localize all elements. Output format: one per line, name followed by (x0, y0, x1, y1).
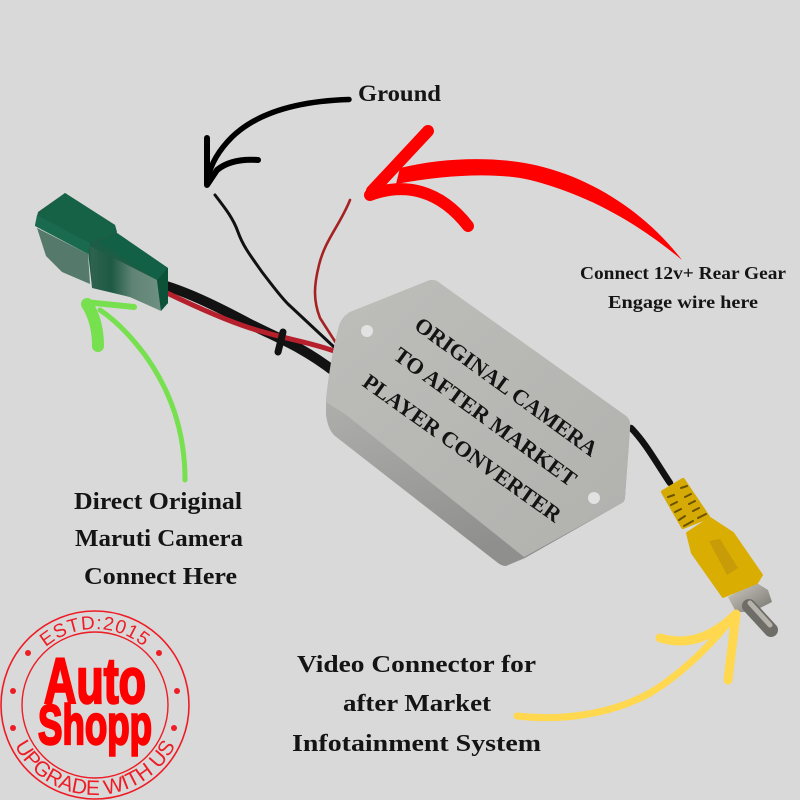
label: camera connector: Connect Here (84, 564, 237, 590)
logo: Auto Shopp stamp: ESTD:2015 (39, 616, 150, 646)
logo: Auto Shopp stamp: UPGRADE WITH US (17, 740, 174, 796)
label: 12v wire: Connect 12v+ Rear Gear (580, 263, 786, 283)
box label (358, 312, 603, 528)
label: video connector: after Market (343, 690, 492, 717)
box label: PLAYER CONVERTER (358, 369, 567, 528)
arrow: yellow video (517, 614, 736, 718)
connector cable bundle and loose wires (163, 195, 350, 372)
label: camera connector: Maruti Camera (75, 526, 243, 552)
label: video connector: Infotainment System (292, 730, 541, 757)
logo: Auto Shopp stamp: Shopp (38, 693, 152, 756)
label: camera connector (74, 489, 243, 590)
mounting hole: bottom right (588, 492, 600, 504)
converter box (326, 280, 630, 566)
box label: TO AFTER MARKET (389, 342, 582, 492)
arrow: red 12v wire (370, 131, 682, 260)
green camera connector (35, 193, 168, 311)
arrow: green camera (85, 302, 185, 480)
label: video connector (292, 651, 541, 757)
label: 12v wire (580, 263, 786, 312)
label: video connector: Video Connector for (297, 651, 536, 678)
label: ground: Ground (358, 81, 441, 106)
yellow RCA plug (663, 480, 772, 630)
label: 12v wire: Engage wire here (608, 292, 758, 312)
label: camera connector: Direct Original (74, 489, 242, 515)
black video cable (631, 428, 670, 483)
arrow: ground (207, 100, 349, 185)
box label: ORIGINAL CAMERA (410, 312, 603, 461)
logo: Auto Shopp stamp (0, 610, 190, 800)
mounting hole: top left (361, 325, 373, 337)
logo: Auto Shopp stamp: Auto (44, 645, 146, 717)
